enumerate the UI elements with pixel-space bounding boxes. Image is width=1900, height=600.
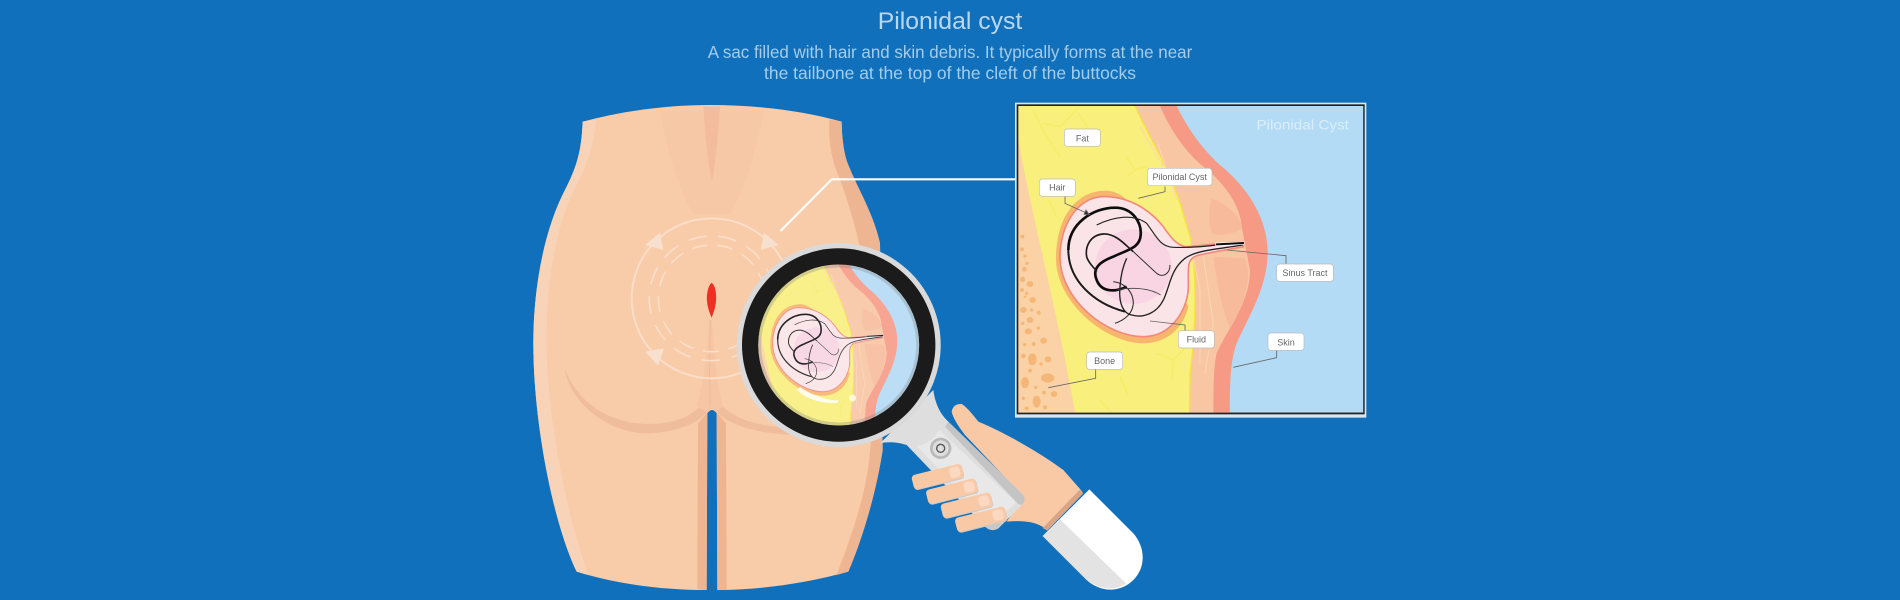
subtitle text: A sac filled with hair and skin debris. It typically forms at the near [708,42,1192,62]
label: Pilonidal Cyst [1147,168,1212,186]
leader lines [1048,187,1286,388]
handle button [930,438,951,459]
subtitle text: the tailbone at the top of the cleft of the buttocks [764,63,1136,83]
hand holding magnifier [880,390,1143,590]
fingers [911,463,1008,534]
title: Pilonidal cyst [878,8,1023,35]
label: Hair [1039,179,1075,196]
label: Sinus Tract: Sinus Tract [1283,268,1328,278]
label: Skin: Skin [1277,337,1295,347]
tissue cross-section [1018,106,1364,413]
cuff band [1043,489,1083,531]
lens black ring [742,248,935,442]
magnified tissue [758,264,920,426]
label: Fat: Fat [1076,133,1089,143]
lens outer rim [737,243,941,447]
label: Pilonidal Cyst: Pilonidal Cyst [1152,172,1207,182]
hand palm [952,404,1082,529]
coat sleeve [1043,489,1143,590]
circular arrows around cyst [632,218,792,378]
label: Fluid: Fluid [1187,335,1206,345]
label: Fluid [1178,331,1214,348]
buttocks body illustration [533,105,883,590]
label: Bone [1087,352,1123,369]
label: Sinus Tract [1277,264,1333,281]
label: Bone: Bone [1094,356,1115,366]
magnifier handle [880,390,1025,530]
magnifying glass lens [737,243,955,447]
inset panel: cross-section of pilonidal cyst [1000,90,1366,423]
inset frame [1015,103,1366,418]
pointer line from body to inset [780,179,1016,231]
inset heading: Pilonidal Cyst [1256,116,1349,132]
label: Fat [1064,129,1100,146]
label: Hair: Hair [1049,183,1066,193]
red cyst opening [707,283,716,318]
subtitle text [708,42,1192,83]
label: Skin [1268,333,1304,350]
